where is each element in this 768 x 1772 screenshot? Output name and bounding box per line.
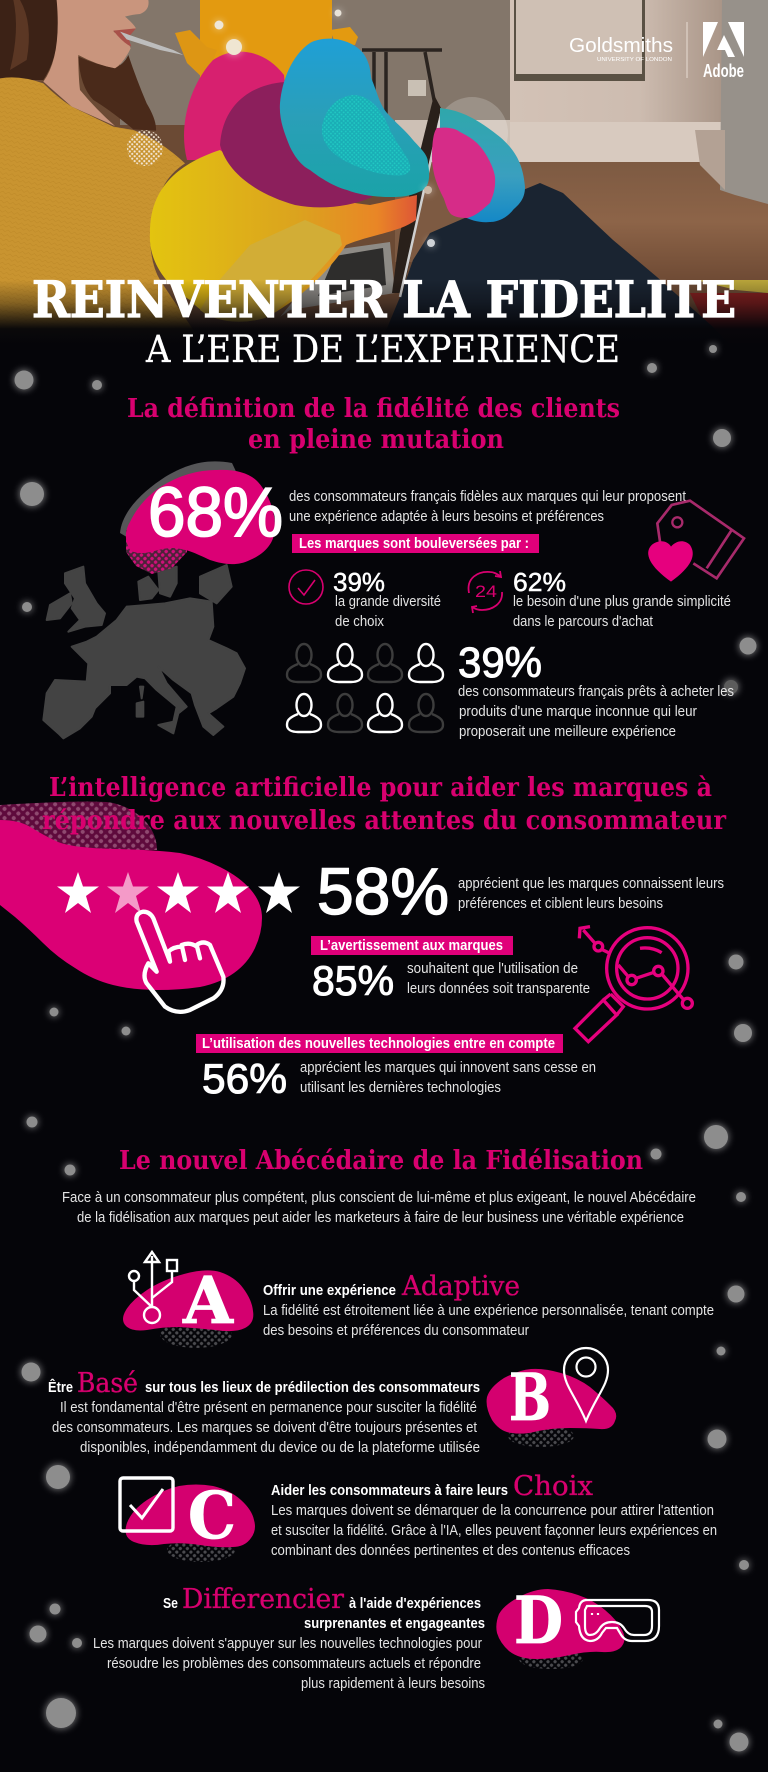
item B bbox=[48, 1348, 616, 1456]
text D: plus rapidement à leurs besoins bbox=[301, 1676, 485, 1692]
logo divider and Adobe bbox=[687, 22, 744, 81]
pink blob bbox=[0, 820, 262, 990]
label bar: L’utilisation des nouvelles technologies entre en compte bbox=[202, 1036, 555, 1052]
stat 39% unknown brand: produits d'une marque inconnue qui leur bbox=[459, 704, 697, 720]
icon: pointing hand bbox=[136, 912, 224, 1012]
text 68%: des consommateurs français fidèles aux marques qui leur proposent bbox=[289, 489, 686, 505]
text C: Aider les consommateurs à faire leurs bbox=[271, 1483, 508, 1499]
stat 39% unknown brand bbox=[458, 639, 734, 740]
dotted circle bbox=[127, 130, 163, 166]
title bbox=[32, 270, 736, 371]
heading: Le nouvel Abécédaire de la Fidélisation bbox=[119, 1146, 643, 1176]
heading: en pleine mutation bbox=[248, 425, 504, 455]
label bar: L’avertissement aux marques bbox=[320, 938, 503, 954]
icon: five stars bbox=[57, 872, 300, 913]
text B bbox=[48, 1368, 480, 1456]
stat 85% bbox=[312, 957, 590, 1004]
stat 62% simplicity: 62% bbox=[513, 567, 566, 597]
stat 56%: apprécient les marques qui innovent sans cesse en bbox=[300, 1060, 596, 1076]
icon: location pin bbox=[564, 1348, 608, 1421]
text A: des besoins et préférences du consommateur bbox=[263, 1323, 529, 1339]
title: A L’ERE DE L’EXPERIENCE bbox=[145, 328, 620, 371]
hero bottom fade bbox=[0, 280, 768, 345]
blob: blue bbox=[280, 39, 429, 197]
text C: et susciter la fidélité. Grâce à l'IA, elles peuvent façonner leurs expériences en bbox=[271, 1523, 717, 1539]
logo divider and Adobe: Adobe bbox=[703, 61, 744, 81]
item A bbox=[123, 1252, 714, 1348]
text D: résoudre les problèmes des consommateurs actuels et répondre bbox=[107, 1656, 481, 1672]
blob: magenta bbox=[184, 52, 292, 160]
stat 68%: 68% bbox=[148, 473, 283, 551]
icon: magnifying glass bbox=[575, 927, 692, 1042]
text D: Se bbox=[163, 1596, 178, 1612]
icon: VR headset bbox=[576, 1600, 659, 1641]
icon: check circle bbox=[289, 570, 323, 604]
stat 56% bbox=[202, 1055, 596, 1102]
item D bbox=[93, 1583, 659, 1692]
letter B: B bbox=[509, 1360, 551, 1436]
icon: 24 hour arrows: 24 bbox=[475, 582, 497, 601]
letter A: A bbox=[182, 1263, 235, 1339]
map of Europe bbox=[43, 565, 245, 738]
heading bbox=[42, 773, 726, 836]
stat 85%: souhaitent que l'utilisation de bbox=[407, 961, 578, 977]
introduction: Face à un consommateur plus compétent, plus conscient de lui-même et plus exigeant, le nouvel Abécédaire bbox=[62, 1190, 696, 1206]
text A: La fidélité est étroitement liée à une expérience personnalisée, tenant compte bbox=[263, 1303, 714, 1319]
pink blob B bbox=[487, 1369, 616, 1434]
icon: USB bbox=[129, 1252, 177, 1323]
text D: Les marques doivent s'appuyer sur les nouvelles technologies pour bbox=[93, 1636, 482, 1652]
blob: yellow orange bbox=[150, 150, 417, 322]
text B: Basé bbox=[77, 1368, 138, 1399]
stat 85%: 85% bbox=[312, 957, 394, 1004]
dotted blob D bbox=[519, 1649, 583, 1669]
text B: des consommateurs. Les marques se doivent d'être toujours présentes et bbox=[52, 1420, 477, 1436]
stat 62% simplicity: le besoin d'une plus grande simplicité bbox=[513, 594, 731, 610]
heading: L’intelligence artificielle pour aider les marques à bbox=[49, 773, 712, 803]
stat 58% bbox=[317, 854, 724, 928]
heading bbox=[127, 394, 620, 455]
text D: à l'aide d'expériences bbox=[349, 1596, 481, 1612]
text C: combinant des données pertinentes et des contenus efficaces bbox=[271, 1543, 630, 1559]
stat 39% diversity bbox=[333, 567, 441, 630]
logo: Goldsmiths: UNIVERSITY OF LONDON bbox=[597, 57, 672, 63]
stat 58%: apprécient que les marques connaissent leurs bbox=[458, 876, 724, 892]
grey blob edge bbox=[120, 461, 240, 545]
dotted Scandinavia bbox=[126, 530, 187, 574]
letter D: D bbox=[514, 1583, 563, 1659]
icon: grid of people bbox=[287, 644, 443, 732]
pink blob bbox=[126, 470, 275, 564]
introduction bbox=[62, 1190, 696, 1226]
text A: Adaptive bbox=[401, 1271, 520, 1302]
icon: tag with heart bbox=[648, 501, 744, 582]
blob: teal dotted bbox=[322, 95, 410, 176]
text 68% bbox=[289, 489, 686, 525]
text A bbox=[263, 1271, 714, 1339]
dotted dark blob bbox=[0, 802, 157, 850]
introduction: de la fidélisation aux marques peut aider les marketeurs à faire de leur business une véritable expérience bbox=[77, 1210, 684, 1226]
heading: répondre aux nouvelles attentes du consommateur bbox=[42, 806, 726, 836]
blob: dark magenta overlap bbox=[220, 82, 372, 207]
text D: surprenantes et engageantes bbox=[304, 1616, 485, 1632]
stat 39% diversity: la grande diversité bbox=[335, 594, 441, 610]
stat 62% simplicity bbox=[513, 567, 731, 630]
text B: sur tous les lieux de prédilection des consommateurs bbox=[145, 1380, 480, 1396]
panel: loyalty alphabet bbox=[48, 1146, 717, 1692]
stat 85%: leurs données soit transparente bbox=[407, 981, 590, 997]
text D: Differencier bbox=[182, 1584, 344, 1615]
pink blob C bbox=[126, 1484, 255, 1547]
text A: Offrir une expérience bbox=[263, 1283, 396, 1299]
letter C: C bbox=[188, 1478, 236, 1554]
icon: 24 hour arrows bbox=[469, 571, 502, 613]
panel: artificial intelligence bbox=[0, 773, 726, 1102]
text C: Choix bbox=[513, 1471, 593, 1502]
text B: Il est fondamental d'être présent en permanence pour susciter la fidélité bbox=[60, 1400, 477, 1416]
pink blob A bbox=[123, 1270, 253, 1331]
panel: changing definition of loyalty bbox=[43, 394, 744, 740]
text B: Être bbox=[48, 1378, 73, 1396]
hero photo: woman with laptop and coloured blobs bbox=[0, 0, 768, 345]
dotted blob B bbox=[508, 1425, 574, 1447]
blob: right teal bbox=[440, 108, 525, 222]
logo: Goldsmiths: Goldsmiths bbox=[569, 35, 673, 57]
stat 39% unknown brand: proposerait une meilleure expérience bbox=[459, 724, 676, 740]
blob: right light circle bbox=[436, 97, 508, 169]
stat 39% diversity: de choix bbox=[335, 614, 385, 630]
dotted blob A bbox=[160, 1320, 232, 1348]
item C bbox=[120, 1471, 717, 1562]
label bar: Les marques sont bouleversées par : bbox=[299, 536, 529, 552]
stat 56%: utilisant les dernières technologies bbox=[300, 1080, 501, 1096]
stat 56%: 56% bbox=[202, 1055, 287, 1102]
text C: Les marques doivent se démarquer de la concurrence pour attirer l'attention bbox=[271, 1503, 714, 1519]
stat 39% unknown brand: 39% bbox=[458, 639, 542, 687]
stat 39% unknown brand: des consommateurs français prêts à acheter les bbox=[458, 684, 734, 700]
text D bbox=[93, 1584, 485, 1692]
pink blob D bbox=[496, 1589, 624, 1659]
stat 39% diversity: 39% bbox=[333, 567, 385, 597]
icon: checkbox bbox=[120, 1478, 173, 1531]
stat 58%: 58% bbox=[317, 854, 449, 928]
blob: right magenta bbox=[432, 128, 495, 218]
dotted blob C bbox=[167, 1538, 235, 1562]
text B: disponibles, indépendamment du device ou de la plateforme utilisée bbox=[80, 1440, 480, 1456]
text C bbox=[271, 1471, 717, 1559]
stat 62% simplicity: dans le parcours d'achat bbox=[513, 614, 653, 630]
heading: La définition de la fidélité des clients bbox=[127, 394, 620, 424]
text 68%: une expérience adaptée à leurs besoins et préférences bbox=[289, 509, 604, 525]
stat 58%: préférences et ciblent leurs besoins bbox=[458, 896, 663, 912]
